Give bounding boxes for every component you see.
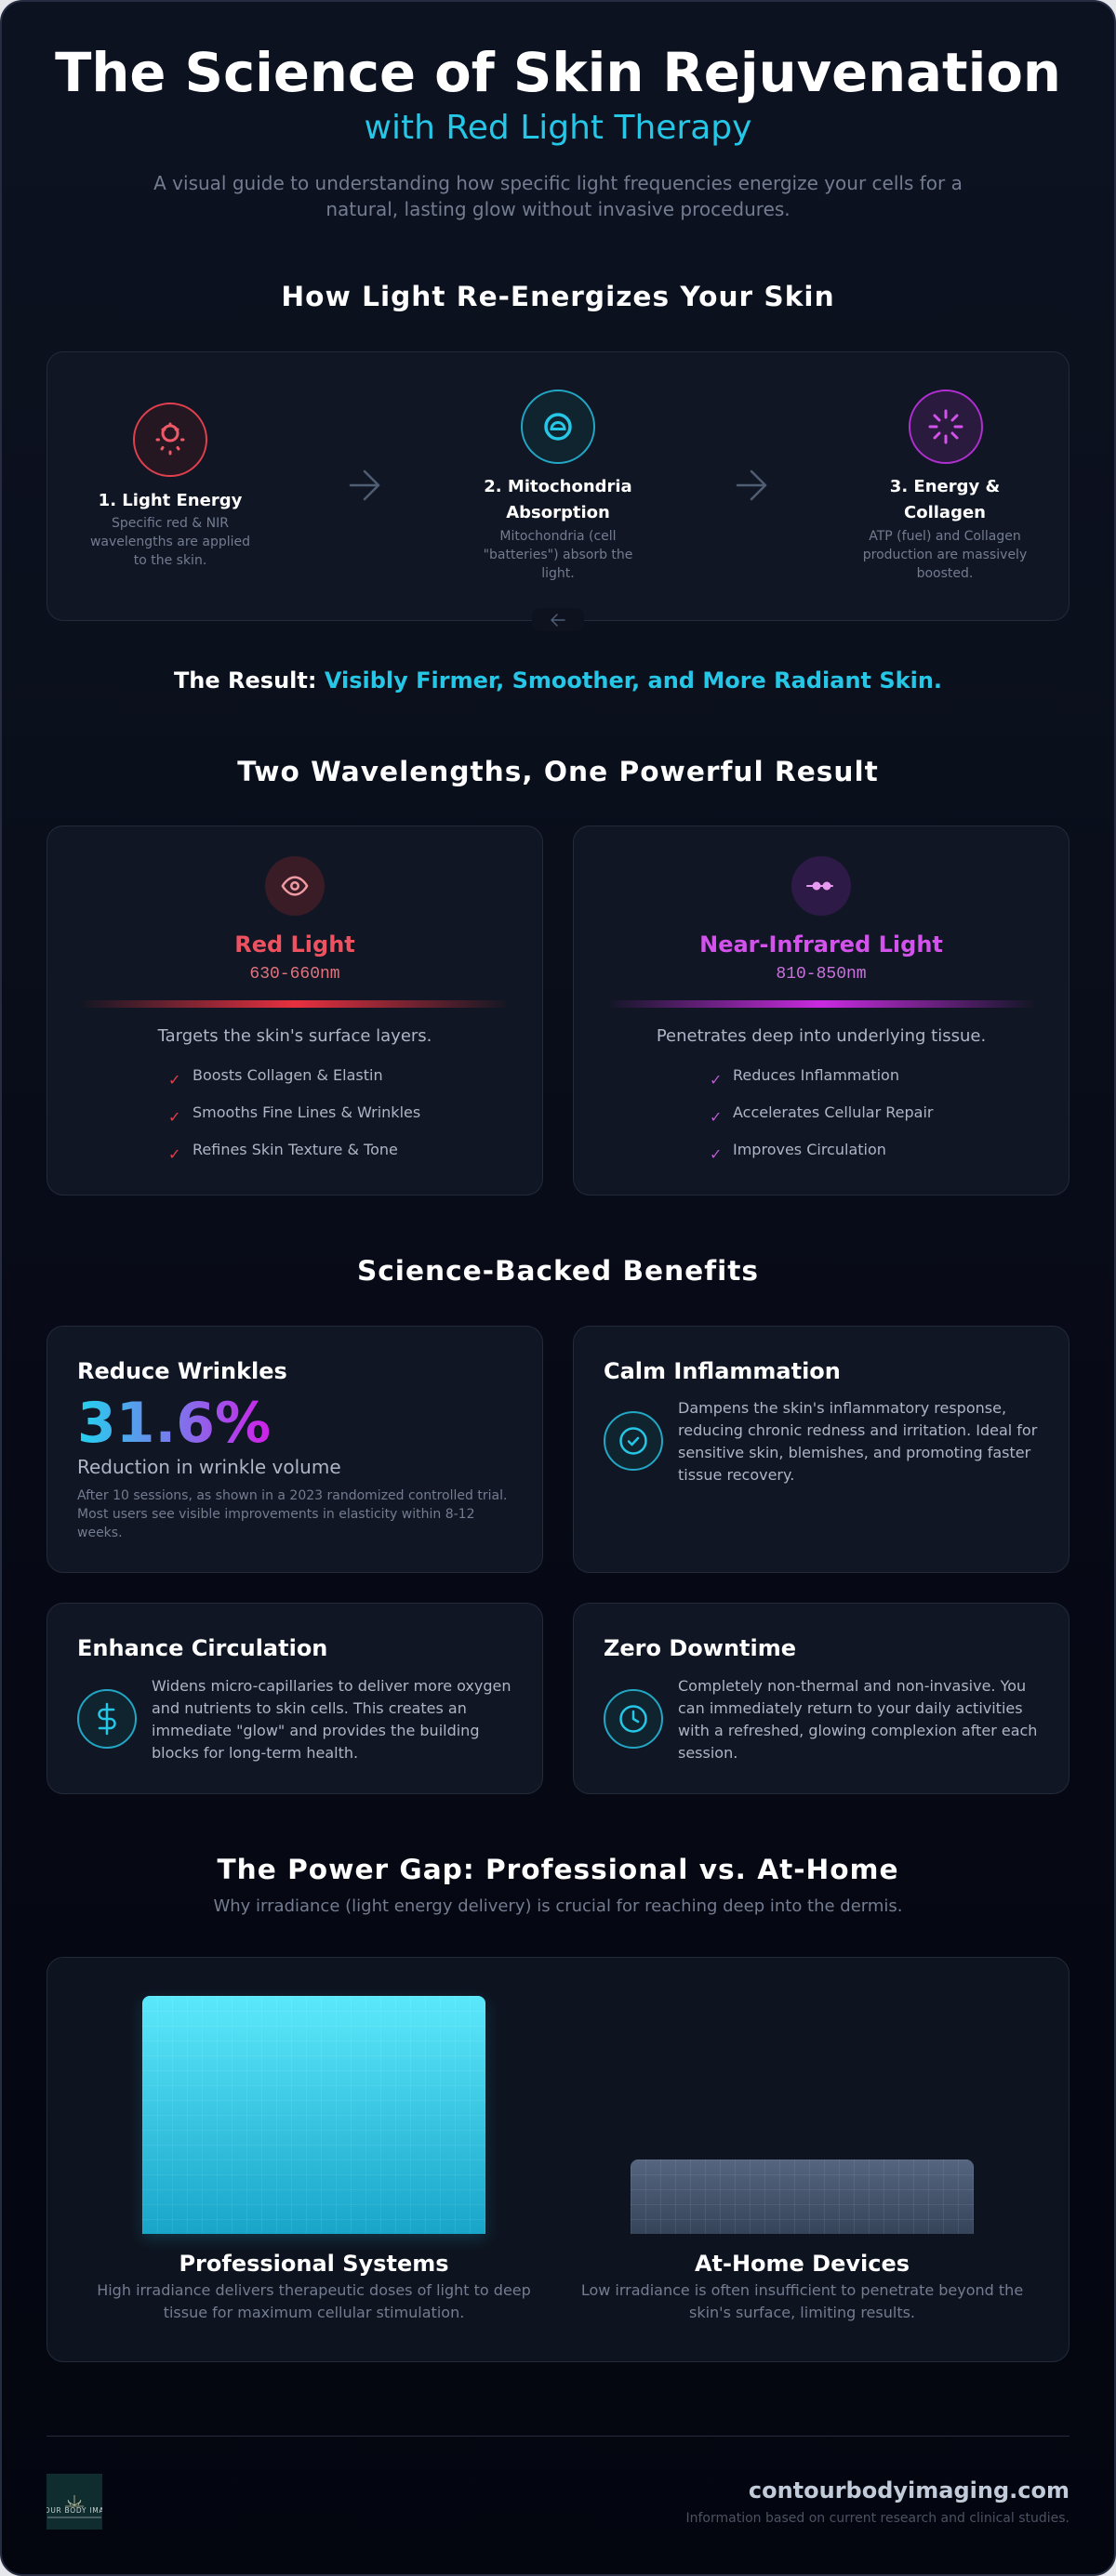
intro text: A visual guide to understanding how specific light frequencies energize your cells for a — [153, 172, 963, 194]
step 3 description — [863, 529, 1027, 581]
step 3 title: 3. Energy & — [890, 477, 1000, 496]
panel: near-infrared light — [573, 826, 1070, 1196]
red beam — [78, 1000, 512, 1008]
panel: reduce wrinkles — [46, 1326, 543, 1573]
red wavelength: 630-660nm — [249, 965, 340, 984]
card text: session. — [678, 1744, 737, 1762]
result statement: The Result: Visibly Firmer, Smoother, and More Radiant Skin. — [174, 667, 942, 694]
nir benefit list: ✓ — [710, 1145, 722, 1163]
statistic note: After 10 sessions, as shown in a 2023 randomized controlled trial. — [77, 1488, 507, 1503]
step 1 description: Specific red & NIR — [112, 516, 229, 531]
nir summary: Penetrates deep into underlying tissue. — [657, 1026, 986, 1046]
subtitle: with Red Light Therapy — [365, 109, 751, 147]
intro text — [153, 172, 963, 220]
card text: tissue recovery. — [678, 1466, 794, 1484]
step 1 title: 1. Light Energy — [99, 491, 242, 510]
nir benefit list: Improves Circulation — [733, 1141, 886, 1158]
card text: with a refreshed, glowing complexion after each — [678, 1722, 1037, 1739]
step 3 title: Collagen — [904, 503, 986, 522]
nir benefit list — [710, 1066, 934, 1163]
arrow: step 1 to 2 — [350, 470, 379, 500]
icon: light energy — [133, 403, 207, 477]
step 3 — [863, 390, 1027, 581]
card title: Reduce Wrinkles — [77, 1358, 287, 1384]
step 1 description: to the skin. — [134, 553, 206, 568]
panel: zero downtime — [573, 1603, 1070, 1794]
at-home label: At-Home Devices — [695, 2251, 910, 2277]
statistic note: weeks. — [77, 1526, 123, 1540]
heading: how light re-energizes: How Light Re-Energizes Your Skin — [281, 281, 835, 312]
red summary: Targets the skin's surface layers. — [158, 1026, 432, 1046]
step 2 title: 2. Mitochondria — [484, 477, 632, 496]
step 2 description: light. — [541, 566, 575, 581]
panel: power comparison chart — [46, 1957, 1070, 2362]
icon: energy burst — [909, 390, 983, 464]
step 3 title — [890, 477, 1000, 522]
arrow: step 2 to 3 — [737, 470, 766, 500]
step 2 description: "batteries") absorb the — [484, 548, 632, 562]
statistic label: Reduction in wrinkle volume — [77, 1456, 341, 1478]
professional description — [97, 2281, 531, 2321]
step 3 description: ATP (fuel) and Collagen — [869, 529, 1021, 544]
panel: enhance circulation — [46, 1603, 543, 1794]
red benefit list: ✓ — [168, 1145, 180, 1163]
step 2 — [484, 390, 632, 581]
footer divider — [46, 2436, 1070, 2437]
footer website: contourbodyimaging.com — [749, 2477, 1070, 2503]
step 2 title — [484, 477, 632, 522]
professional label: Professional Systems — [179, 2251, 449, 2277]
card text: blocks for long-term health. — [152, 1744, 358, 1762]
panel: red light — [46, 826, 543, 1196]
nir benefit list: Reduces Inflammation — [733, 1066, 899, 1084]
title: The Science of Skin Rejuvenation — [55, 42, 1061, 104]
card text: can immediately return to your daily activities — [678, 1699, 1023, 1717]
card text: immediate "glow" and provides the building — [152, 1722, 479, 1739]
step 3 description: production are massively — [863, 548, 1027, 562]
nir wavelength: 810-850nm — [776, 965, 867, 984]
step 1 description: wavelengths are applied — [90, 535, 250, 549]
red benefit list: Refines Skin Texture & Tone — [193, 1141, 398, 1158]
at-home description: Low irradiance is often insufficient to penetrate beyond the — [581, 2281, 1023, 2299]
heading: two wavelengths: Two Wavelengths, One Powerful Result — [237, 756, 879, 787]
card text — [152, 1677, 512, 1762]
card text: and nutrients to skin cells. This creates an — [152, 1699, 467, 1717]
step 1 — [90, 403, 250, 568]
card title: Calm Inflammation — [604, 1358, 841, 1384]
step 3 description: boosted. — [917, 566, 973, 581]
statistic note — [77, 1488, 507, 1540]
card text: Widens micro-capillaries to deliver more oxygen — [152, 1677, 512, 1695]
card text: Completely non-thermal and non-invasive. You — [678, 1677, 1026, 1695]
step 2 description: Mitochondria (cell — [499, 529, 617, 544]
red benefit list: ✓ — [168, 1071, 180, 1089]
step 1 description — [90, 516, 250, 568]
icon: eye — [265, 856, 325, 916]
logo — [46, 2474, 102, 2530]
statistic note: Most users see visible improvements in elasticity within 8-12 — [77, 1507, 474, 1522]
panel: process steps — [46, 351, 1070, 621]
heading: power gap: The Power Gap: Professional vs. At-Home — [217, 1854, 899, 1885]
nir benefit list: Accelerates Cellular Repair — [733, 1103, 934, 1121]
red benefit list: ✓ — [168, 1108, 180, 1126]
back arrow pill — [532, 608, 584, 631]
nir beam — [604, 1000, 1038, 1008]
intro text: natural, lasting glow without invasive procedures. — [326, 198, 790, 220]
professional description: High irradiance delivers therapeutic doses of light to deep — [97, 2281, 531, 2299]
icon: dollar — [77, 1689, 137, 1749]
card title: Enhance Circulation — [77, 1635, 327, 1661]
card title: Zero Downtime — [604, 1635, 796, 1661]
icon: nodes — [791, 856, 851, 916]
panel: calm inflammation — [573, 1326, 1070, 1573]
heading: science-backed benefits: Science-Backed Benefits — [357, 1255, 759, 1287]
red light name: Red Light — [234, 931, 355, 958]
professional description: tissue for maximum cellular stimulation. — [164, 2304, 464, 2321]
card text — [678, 1677, 1037, 1762]
card text: sensitive skin, blemishes, and promoting faster — [678, 1444, 1030, 1461]
red benefit list: Smooths Fine Lines & Wrinkles — [193, 1103, 420, 1121]
footer note: Information based on current research and clinical studies. — [686, 2511, 1070, 2526]
step 2 description — [484, 529, 632, 581]
statistic: 31.6% — [77, 1391, 271, 1456]
power gap subtitle: Why irradiance (light energy delivery) is crucial for reaching deep into the dermis. — [213, 1896, 903, 1916]
icon: check circle — [604, 1411, 663, 1471]
nir light name: Near-Infrared Light — [699, 931, 943, 958]
at-home description — [581, 2281, 1023, 2321]
step 2 title: Absorption — [506, 503, 610, 522]
icon: clock — [604, 1689, 663, 1749]
red benefit list — [168, 1066, 420, 1163]
nir benefit list: ✓ — [710, 1108, 722, 1126]
card text: reducing chronic redness and irritation. Ideal for — [678, 1421, 1037, 1439]
bar: professional systems — [142, 1996, 485, 2234]
at-home description: skin's surface, limiting results. — [689, 2304, 915, 2321]
nir benefit list: ✓ — [710, 1071, 722, 1089]
card text: Dampens the skin's inflammatory response, — [678, 1399, 1006, 1417]
icon: mitochondria — [521, 390, 595, 464]
card text — [678, 1399, 1038, 1484]
red benefit list: Boosts Collagen & Elastin — [193, 1066, 383, 1084]
bar: at-home devices — [631, 2160, 974, 2234]
